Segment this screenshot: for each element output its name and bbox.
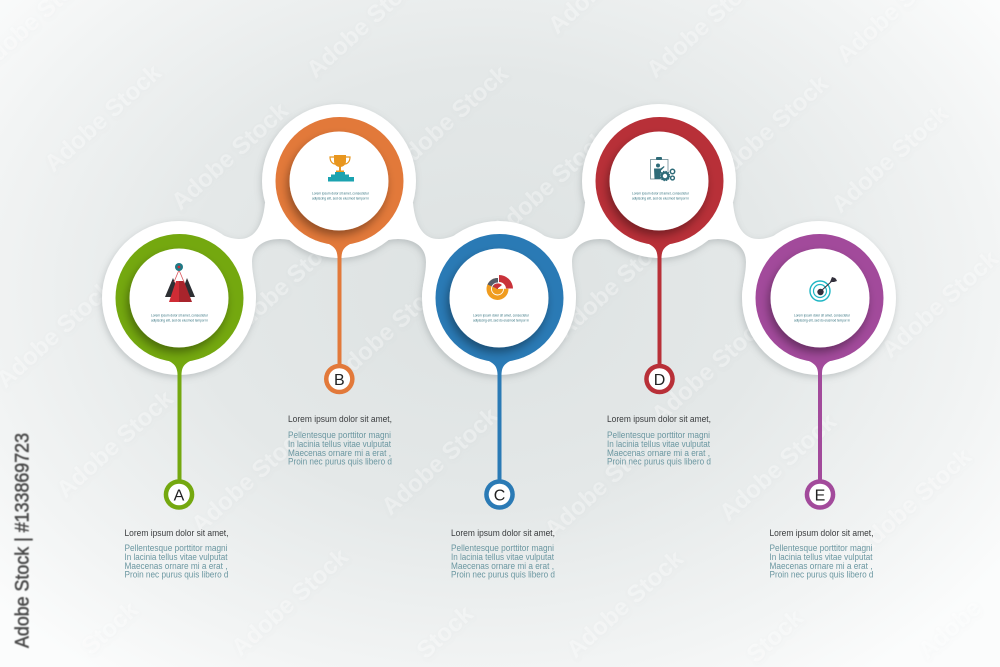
watermark pattern: Adobe Stock <box>714 408 842 527</box>
text block D <box>607 414 711 466</box>
text block A: Proin nec purus quis libero d <box>124 570 229 580</box>
text block D: Maecenas ornare mi a erat , <box>607 448 710 458</box>
icon: trophy <box>328 155 354 182</box>
node letter C <box>489 484 510 505</box>
text block E: Maecenas ornare mi a erat , <box>770 561 872 571</box>
node letter D <box>649 368 670 390</box>
watermark pattern: Stock <box>77 596 144 660</box>
node letter B <box>328 368 350 390</box>
small text C: Lorem ipsum dolor sit amet, consectetur <box>473 314 530 318</box>
small text B <box>312 192 370 200</box>
small text E <box>794 314 851 322</box>
ring and stem C <box>436 234 564 510</box>
panel: step B <box>276 117 404 466</box>
watermark pattern: Adobe <box>913 594 987 664</box>
small text A <box>151 314 209 322</box>
white connecting ribbon <box>102 104 896 375</box>
small text E: Lorem ipsum dolor sit amet, consectetur <box>794 314 851 318</box>
icon: target <box>810 277 837 301</box>
panel: step D <box>596 117 724 466</box>
text block B: Pellentesque porttitor magni <box>288 430 391 440</box>
watermark pattern: Adobe Stock <box>539 425 667 544</box>
text block C: Proin nec purus quis libero d <box>451 570 555 580</box>
watermark pattern: Adobe Stock <box>849 443 977 562</box>
node letter A: A <box>174 488 185 504</box>
node letter A <box>168 484 190 505</box>
watermark pattern: Adobe Stock <box>221 225 349 344</box>
watermark pattern: Adobe Stock <box>376 402 504 521</box>
icon: presenter with gears <box>650 157 675 181</box>
watermark pattern: Adobe Stock <box>646 310 774 429</box>
watermark pattern: Adobe Stock <box>39 59 167 178</box>
text block B: Lorem ipsum dolor sit amet, <box>288 414 392 424</box>
text block A: Pellentesque porttitor magni <box>124 543 228 553</box>
text block C: In lacinia tellus vitae vulputat <box>451 552 555 562</box>
text block C: Pellentesque porttitor magni <box>451 543 554 553</box>
panel: step C <box>436 234 564 580</box>
text block E <box>770 528 874 580</box>
inner disc B <box>290 132 388 230</box>
small text D: Lorem ipsum dolor sit amet, consectetur <box>632 192 690 196</box>
ring and stem E <box>756 234 884 510</box>
inner disc E <box>770 248 870 348</box>
text block D: Pellentesque porttitor magni <box>607 430 710 440</box>
icon: mountain <box>165 263 195 302</box>
watermark pattern: Stock <box>742 604 809 667</box>
watermark pattern: Adobe Stock <box>486 125 614 244</box>
ring and stem A <box>116 234 244 510</box>
watermark pattern: Adobe Stock <box>551 225 679 344</box>
small text B: adipiscing elit, sed do eiusmod tempor in <box>312 196 369 200</box>
stock id label: Adobe Stock | #133869723 <box>12 433 34 648</box>
node letter C: C <box>494 488 505 504</box>
panel: step A <box>116 234 244 580</box>
inner disc D <box>610 132 708 230</box>
text block C: Maecenas ornare mi a erat , <box>451 561 554 571</box>
text block B: Proin nec purus quis libero d <box>288 456 392 466</box>
watermark pattern: Adobe Stock <box>826 100 954 219</box>
watermark pattern: Adobe Stock <box>561 545 689 664</box>
text block E: Pellentesque porttitor magni <box>770 543 873 553</box>
text block E: In lacinia tellus vitae vulputat <box>770 552 873 562</box>
text block D: In lacinia tellus vitae vulputat <box>607 439 711 449</box>
watermark pattern: Adobe Stock <box>386 60 514 179</box>
watermark pattern: Adobe Stock <box>166 97 294 216</box>
watermark pattern: Adobe Stock <box>876 245 1000 364</box>
small text A: Lorem ipsum dolor sit amet, consectetur <box>151 314 209 318</box>
ring and stem B <box>276 117 404 394</box>
watermark pattern: Adobe Stock <box>226 543 354 662</box>
node letter E: E <box>815 488 825 504</box>
node letter E <box>809 484 831 505</box>
inner disc C <box>450 248 548 348</box>
small text A: adipiscing elit, sed do eiusmod tempor in <box>151 318 208 322</box>
watermark pattern: Adobe Stock <box>706 70 834 189</box>
watermark pattern: Adobe Stock <box>186 420 314 539</box>
text block B: In lacinia tellus vitae vulputat <box>288 439 392 449</box>
node letter D: D <box>654 372 665 389</box>
ring and stem D <box>596 117 724 394</box>
text block B <box>288 414 392 466</box>
text block C <box>451 528 555 580</box>
small text B: Lorem ipsum dolor sit amet, consectetur <box>312 192 370 196</box>
text block A: In lacinia tellus vitae vulputat <box>124 552 228 562</box>
text block D: Proin nec purus quis libero d <box>607 456 711 466</box>
text block E: Proin nec purus quis libero d <box>770 570 874 580</box>
small text C <box>473 314 530 322</box>
small text C: adipiscing elit, sed do eiusmod tempor in <box>473 318 529 322</box>
text block A <box>124 528 229 580</box>
watermark pattern: Adobe Stock <box>51 385 179 504</box>
small text D: adipiscing elit, sed do eiusmod tempor in <box>632 196 689 200</box>
watermark pattern: Stock <box>412 600 479 664</box>
text block A: Maecenas ornare mi a erat , <box>124 561 228 571</box>
icon: donut chart <box>486 275 513 300</box>
text block C: Lorem ipsum dolor sit amet, <box>451 528 555 538</box>
text block D: Lorem ipsum dolor sit amet, <box>607 414 711 424</box>
small text E: adipiscing elit, sed do eiusmod tempor in <box>794 318 850 322</box>
watermark pattern: Adobe Stock <box>326 270 454 389</box>
text block A: Lorem ipsum dolor sit amet, <box>124 528 228 538</box>
inner disc A <box>130 248 228 348</box>
text block B: Maecenas ornare mi a erat , <box>288 448 391 458</box>
node letter B: B <box>334 372 345 389</box>
small text D <box>632 192 690 200</box>
panel: step E <box>756 234 884 580</box>
text block E: Lorem ipsum dolor sit amet, <box>770 528 874 538</box>
